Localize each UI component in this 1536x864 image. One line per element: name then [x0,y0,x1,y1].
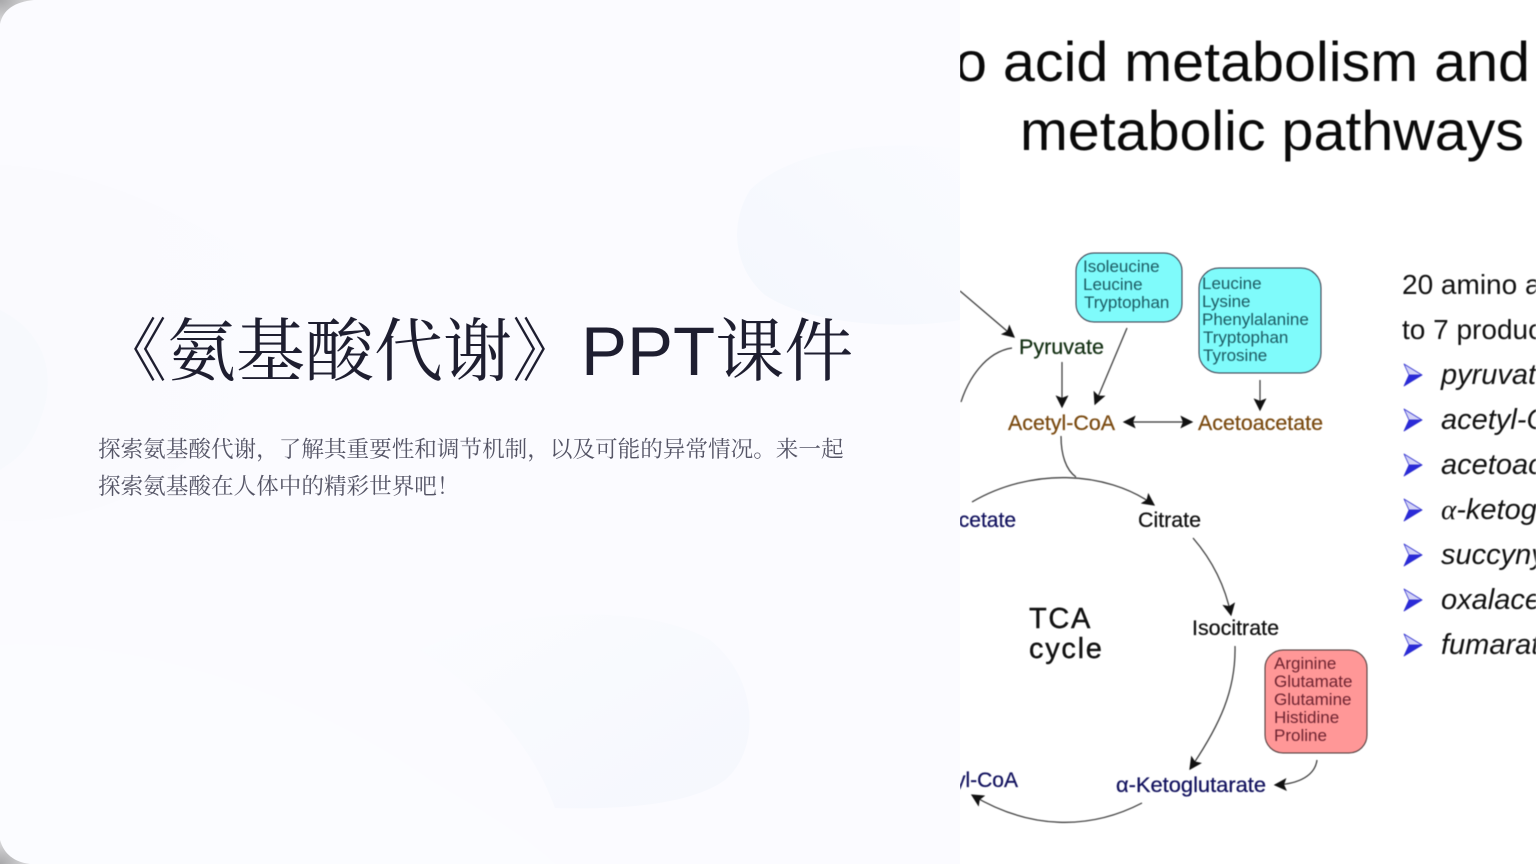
box: pyruvate precursors [1076,253,1182,322]
pathway labels: Acetoacetate [1198,412,1323,435]
box: pyruvate precursors: Tryptophan [1084,293,1169,312]
box: alpha-ketoglutarate precursors: Proline [1274,726,1327,745]
pathway labels: Isocitrate [1192,617,1279,640]
box: acetoacetate precursors [1199,268,1321,373]
box: acetoacetate precursors: Tryptophan [1203,328,1288,347]
TCA cycle label: cycle [1029,633,1104,665]
box: acetoacetate precursors: Tyrosine [1203,346,1267,365]
box: alpha-ketoglutarate precursors: Glutamine [1274,690,1351,709]
background shapes [0,0,952,864]
box: alpha-ketoglutarate precursors: Histidine [1274,708,1339,727]
box: alpha-ketoglutarate precursors: Arginine [1274,654,1336,673]
bottom-left corner [0,840,30,864]
pathway labels: Acetyl-CoA [1008,412,1115,435]
slide heading [824,30,1530,162]
TCA cycle label [1029,603,1104,665]
TCA cycle label: TCA [1029,603,1092,635]
subtitle text: 探索氨基酸在人体中的精彩世界吧！ [98,474,460,499]
box: pyruvate precursors: Leucine [1083,275,1143,294]
box: acetoacetate precursors: Leucine [1202,274,1262,293]
product list [1440,359,1536,661]
box: acetoacetate precursors: Phenylalanine [1202,310,1309,329]
subtitle text: 探索氨基酸代谢，了解其重要性和调节机制，以及可能的异常情况。来一起 [98,437,844,462]
pathway arrows [960,291,1317,822]
subtitle text [98,437,844,499]
box: alpha-ketoglutarate precursors: Glutamate [1274,672,1352,691]
title: 《氨基酸代谢》PPT课件 [98,313,853,390]
pathway labels: Pyruvate [1019,336,1104,359]
pathway labels: α-Ketoglutarate [1116,774,1266,797]
intro text [1402,269,1536,345]
box: acetoacetate precursors: Lysine [1202,292,1251,311]
pathway labels [892,336,1323,797]
pathway labels: Citrate [1138,509,1201,532]
top-left corner [0,0,34,24]
panel: metabolism slide image [960,0,1536,864]
slide heading: metabolic pathways [1020,99,1524,162]
panel: left title panel [0,0,952,864]
box: pyruvate precursors: Isoleucine [1083,257,1160,276]
box: alpha-ketoglutarate precursors [1265,650,1367,753]
bullet arrows [1404,364,1422,656]
